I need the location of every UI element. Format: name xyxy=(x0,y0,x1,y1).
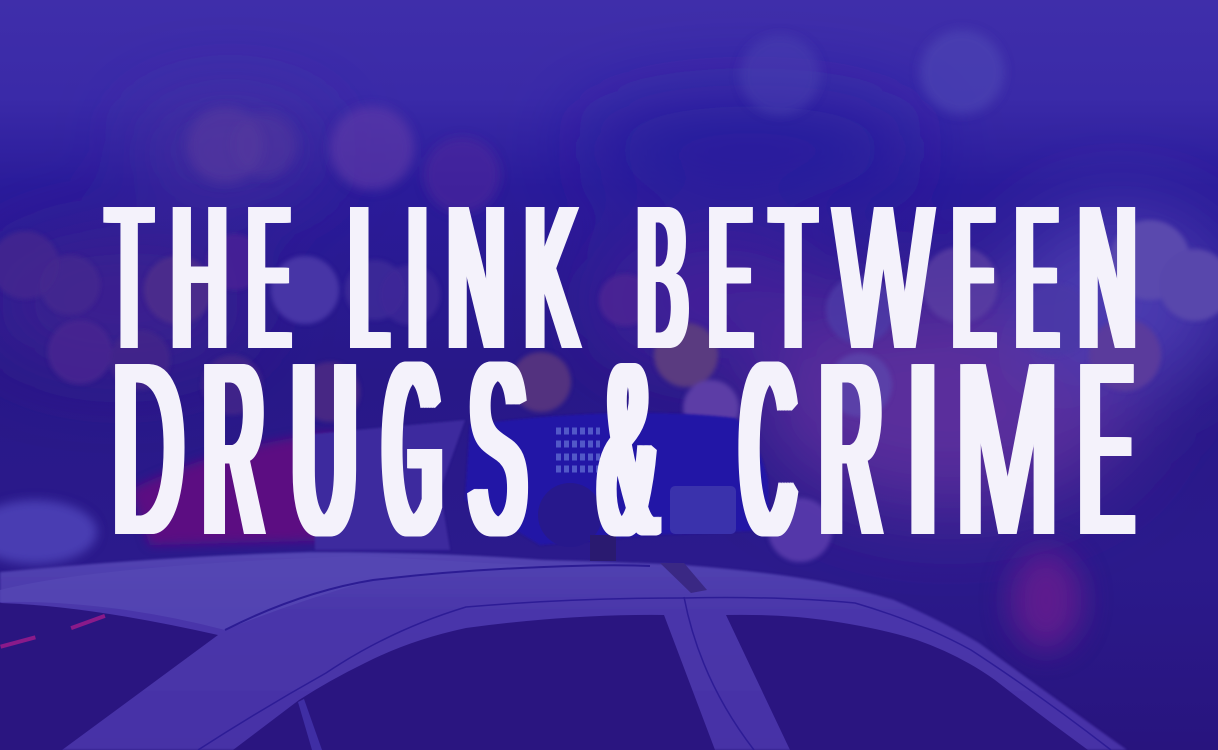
title line 1: T xyxy=(771,162,815,392)
title line 1: T xyxy=(107,162,151,392)
title line 1: H xyxy=(172,162,227,392)
blue light bar xyxy=(465,413,770,545)
roof reflection highlight xyxy=(0,556,540,630)
windshield xyxy=(0,603,218,750)
light bar clear panel xyxy=(670,486,736,534)
title line 1: W xyxy=(835,162,932,392)
front side window xyxy=(233,615,715,750)
title line 1: E xyxy=(710,162,751,392)
title line 1: I xyxy=(406,162,427,392)
magenta reflection xyxy=(1010,550,1082,650)
title line 2: S xyxy=(470,311,525,587)
title line 2: R xyxy=(204,311,263,587)
title line 2: & xyxy=(600,311,656,587)
title line 2: M xyxy=(955,311,1059,587)
title line 1: N xyxy=(1079,162,1136,392)
car roof and body xyxy=(0,552,1127,750)
bokeh lights far xyxy=(187,30,1004,213)
title line 2: R xyxy=(821,311,881,587)
title line 2: I xyxy=(908,311,937,587)
LED grid xyxy=(556,431,600,469)
title line 1: E xyxy=(954,162,994,392)
title line 1: L xyxy=(351,162,387,392)
title line 1: N xyxy=(448,162,505,392)
left glow xyxy=(0,500,97,564)
centre light bar housing xyxy=(312,420,465,550)
rear side window xyxy=(726,615,1088,750)
light bar mount xyxy=(660,563,707,593)
windshield red specks xyxy=(0,614,106,649)
title line 2 xyxy=(113,311,1136,587)
quarter glass divider xyxy=(298,699,322,750)
roof seam xyxy=(225,565,650,630)
title line 1: K xyxy=(525,162,578,392)
title line 2: G xyxy=(385,311,440,587)
title line 1: E xyxy=(1017,162,1057,392)
title line 1: B xyxy=(637,162,687,392)
lower light module xyxy=(538,483,602,547)
title line 1 xyxy=(103,162,1136,435)
title line 2: D xyxy=(113,311,184,587)
title line 1: E xyxy=(249,162,289,392)
door seams xyxy=(198,598,1111,750)
bokeh lights near xyxy=(0,220,1218,562)
soft colour washes xyxy=(0,105,1218,510)
title line 2: U xyxy=(293,311,356,587)
red light bar xyxy=(130,432,345,545)
title line 2: C xyxy=(742,311,794,587)
title line 2: E xyxy=(1080,311,1133,587)
